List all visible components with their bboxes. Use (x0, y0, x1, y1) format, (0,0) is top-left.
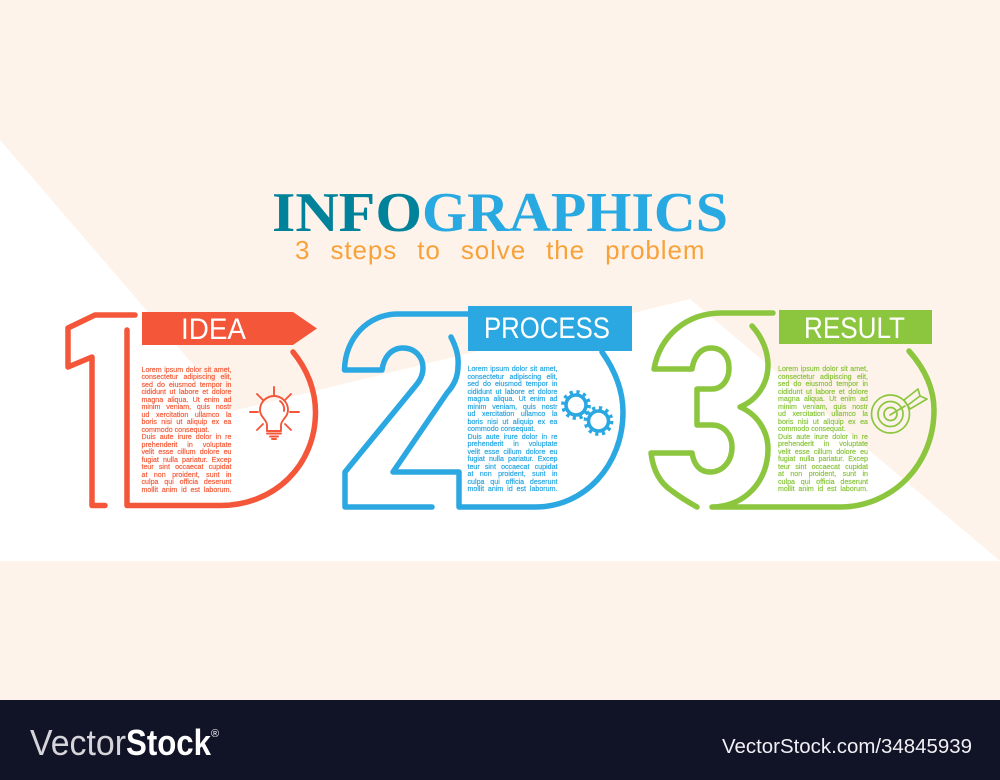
step 2 body text (467, 365, 558, 493)
step 1 body text: mollit anim id est laborum. (142, 486, 232, 494)
step 3 numeral outline (651, 313, 934, 507)
step 1 body text: prehenderit in voluptate (142, 440, 232, 448)
step 2 body text: prehenderit in voluptate (468, 440, 558, 448)
title (272, 182, 728, 244)
step 1 body text: sed do eiusmod tempor in (142, 380, 232, 388)
title: INFO (272, 182, 422, 244)
background white polygon (0, 140, 1000, 561)
step 1 body text: cididunt ut labore et dolore (142, 388, 232, 396)
step 2 banner: PROCESS (484, 312, 610, 345)
step 1 icon: light bulb (250, 387, 299, 439)
step 3 body text: fugiat nulla pariatur. Excep (778, 455, 868, 463)
subtitle: 3 steps to solve the problem (295, 235, 705, 265)
step 1 body text: magna aliqua. Ut enim ad (142, 396, 232, 404)
step 2 body text: boris nisi ut aliquip ex ea (468, 418, 558, 426)
step 3 body text: sed do eiusmod tempor in (778, 380, 868, 388)
step 1 body text: Lorem ipsum dolor sit amet, (142, 366, 232, 374)
step 3 body text: velit esse cillum dolore eu (778, 448, 868, 456)
step 3 body text: culpa qui officia deserunt (778, 478, 868, 486)
footer logo (30, 722, 219, 763)
footer logo: ® (211, 728, 219, 740)
step 1 body text: minim veniam, quis nostr (142, 403, 232, 411)
step 1 body text: velit esse cillum dolore eu (142, 448, 232, 456)
title: GRAPHICS (422, 182, 728, 244)
step 2 body text: mollit anim id est laborum. (468, 485, 558, 493)
step 3 body text: commodo consequat. (778, 425, 846, 433)
footer image id: VectorStock.com/34845939 (722, 736, 972, 758)
step 2 body text: sed do eiusmod tempor in (468, 380, 558, 388)
step 3 body text: consectetur adipiscing elit, (778, 372, 868, 380)
step 1 body text: boris nisi ut aliquip ex ea (142, 418, 232, 426)
step 2 body text: culpa qui officia deserunt (468, 478, 558, 486)
step 3 body text: prehenderit in voluptate (778, 440, 868, 448)
step 3 body text: magna aliqua. Ut enim ad (778, 395, 868, 403)
step 2 body text: cididunt ut labore et dolore (468, 388, 558, 396)
step 3 body text: minim veniam, quis nostr (778, 402, 868, 410)
footer bar (0, 700, 1000, 780)
step 3 body text: Lorem ipsum dolor sit amet, (778, 365, 868, 373)
step 2 body text: Lorem ipsum dolor sit amet, (468, 365, 558, 373)
step 1 body text: teur sint occaecat cupidat (142, 463, 232, 471)
step 1 banner: IDEA (181, 313, 246, 346)
step 1 body text: Duis aute irure dolor in re (142, 433, 232, 441)
step 1 body text: ud xercitation ullamco la (142, 410, 232, 418)
step 1 body text: consectetur adipiscing elit, (142, 373, 232, 381)
step 3 body text: at non proident, sunt in (778, 470, 868, 478)
step 2 body text: consectetur adipiscing elit, (468, 372, 558, 380)
step 3 body text: ud xercitation ullamco la (778, 410, 868, 418)
step 2 body text: fugiat nulla pariatur. Excep (468, 455, 558, 463)
step 2 body text: commodo consequat. (468, 425, 535, 433)
step 2 body text: ud xercitation ullamco la (468, 410, 558, 418)
step 1 body text (141, 366, 232, 494)
step 3 body text: teur sint occaecat cupidat (778, 462, 868, 470)
step 2 numeral outline (344, 314, 623, 507)
step 2 body text: Duis aute irure dolor in re (468, 432, 558, 440)
footer logo: Vector (30, 722, 126, 763)
step 2 icon: gears (563, 392, 612, 434)
step 3 body text: cididunt ut labore et dolore (778, 388, 868, 396)
step 2 body text: minim veniam, quis nostr (468, 402, 558, 410)
step 1 numeral outline (68, 315, 316, 506)
step 1 body text: at non proident, sunt in (142, 470, 232, 478)
step 1 body text: commodo consequat. (142, 426, 209, 434)
step 3 body text: mollit anim id est laborum. (778, 485, 868, 493)
step 2 banner (468, 306, 632, 351)
footer logo: Stock (126, 722, 212, 763)
step 3 body text: Duis aute irure dolor in re (778, 432, 868, 440)
step 3 banner: RESULT (804, 312, 905, 345)
step 3 body text (778, 365, 868, 493)
step 3 body text: boris nisi ut aliquip ex ea (778, 418, 868, 426)
step 2 body text: at non proident, sunt in (468, 470, 558, 478)
step 1 body text: fugiat nulla pariatur. Excep (142, 456, 232, 464)
step 1 body text: culpa qui officia deserunt (142, 478, 232, 486)
step 1 banner (142, 312, 317, 346)
step 2 body text: velit esse cillum dolore eu (468, 448, 558, 456)
step 2 body text: teur sint occaecat cupidat (468, 462, 558, 470)
step 2 body text: magna aliqua. Ut enim ad (468, 395, 558, 403)
step 3 icon: target (872, 389, 927, 433)
